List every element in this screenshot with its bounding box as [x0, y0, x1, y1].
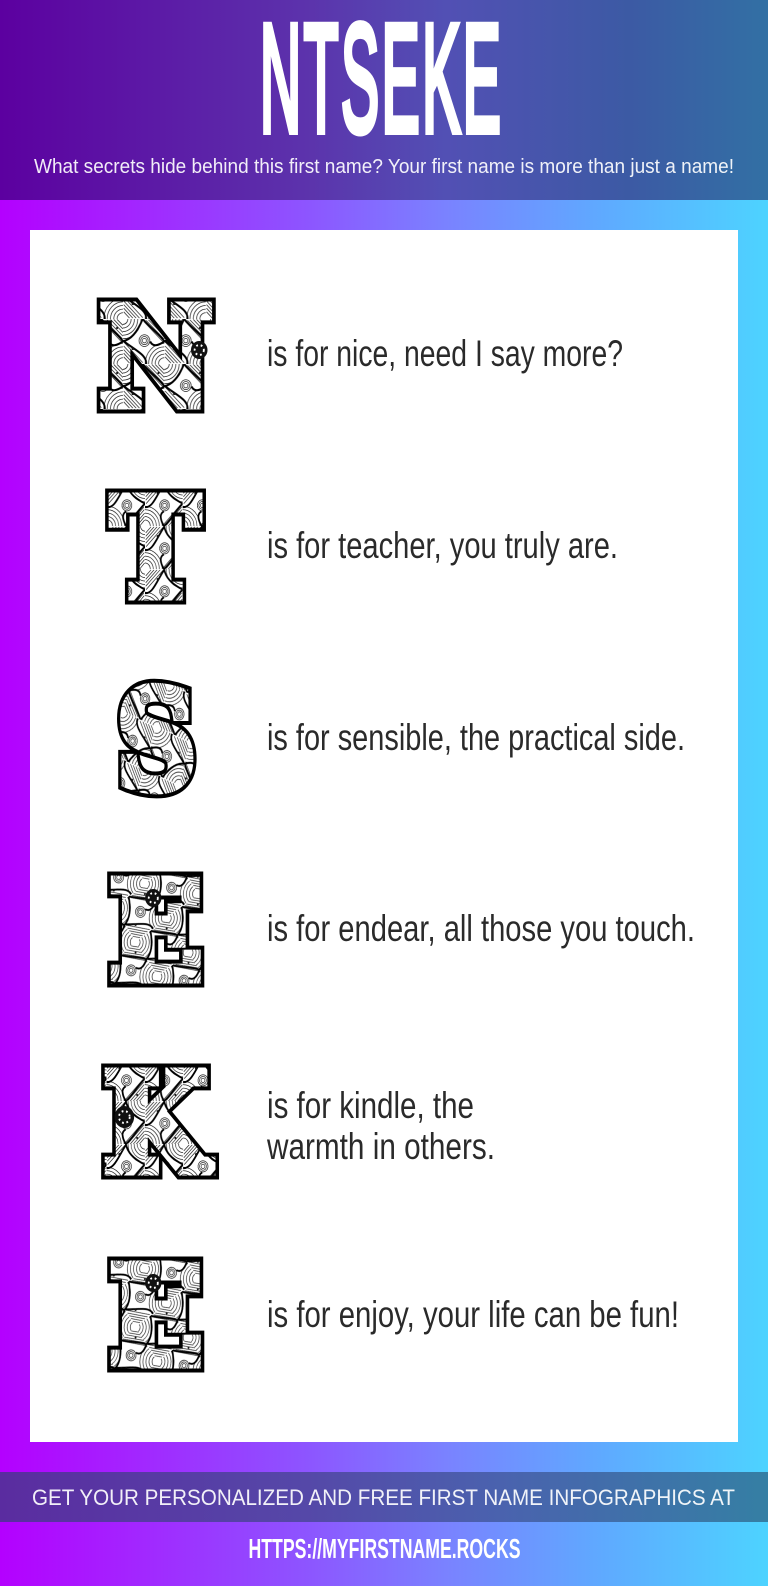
subtitle: What secrets hide behind this first name? Your first name is more than just a name!: [34, 156, 734, 178]
row: E: [110, 853, 695, 1009]
footer banner: [0, 1472, 768, 1522]
header banner: [0, 0, 768, 200]
icon: decorated letter K: K: [104, 1045, 211, 1202]
row: K: [104, 1045, 495, 1202]
text: K lines: warmth in others.: [266, 1126, 495, 1167]
row: E second: [110, 1238, 679, 1394]
icon: decorated letter S: S: [118, 662, 195, 819]
footer URL: HTTPS://MYFIRSTNAME.ROCKS: [248, 1533, 520, 1564]
row: S: [118, 662, 685, 819]
icon: decorated letter K: K: [104, 1045, 211, 1202]
text: K lines: is for kindle, the: [267, 1085, 474, 1126]
white content panel: [30, 230, 738, 1442]
text: N line: is for nice, need I say more?: [267, 333, 623, 374]
icon: decorated letter E: E: [110, 1238, 202, 1394]
icon: decorated letter T: T: [112, 472, 199, 627]
icon: decorated letter S: S: [118, 662, 195, 819]
text: K lines: [266, 1085, 495, 1167]
row: N: [100, 280, 623, 436]
icon: decorated letter N: N: [100, 280, 212, 436]
icon: decorated letter E: E: [110, 853, 202, 1009]
icon: decorated letter E: E: [110, 1238, 202, 1394]
icon: decorated letter E: E: [110, 853, 202, 1009]
icon: decorated letter N: N: [100, 280, 212, 436]
icon: decorated letter T: T: [112, 472, 199, 627]
text: T line: is for teacher, you truly are.: [267, 525, 618, 566]
row: T: [112, 472, 618, 627]
